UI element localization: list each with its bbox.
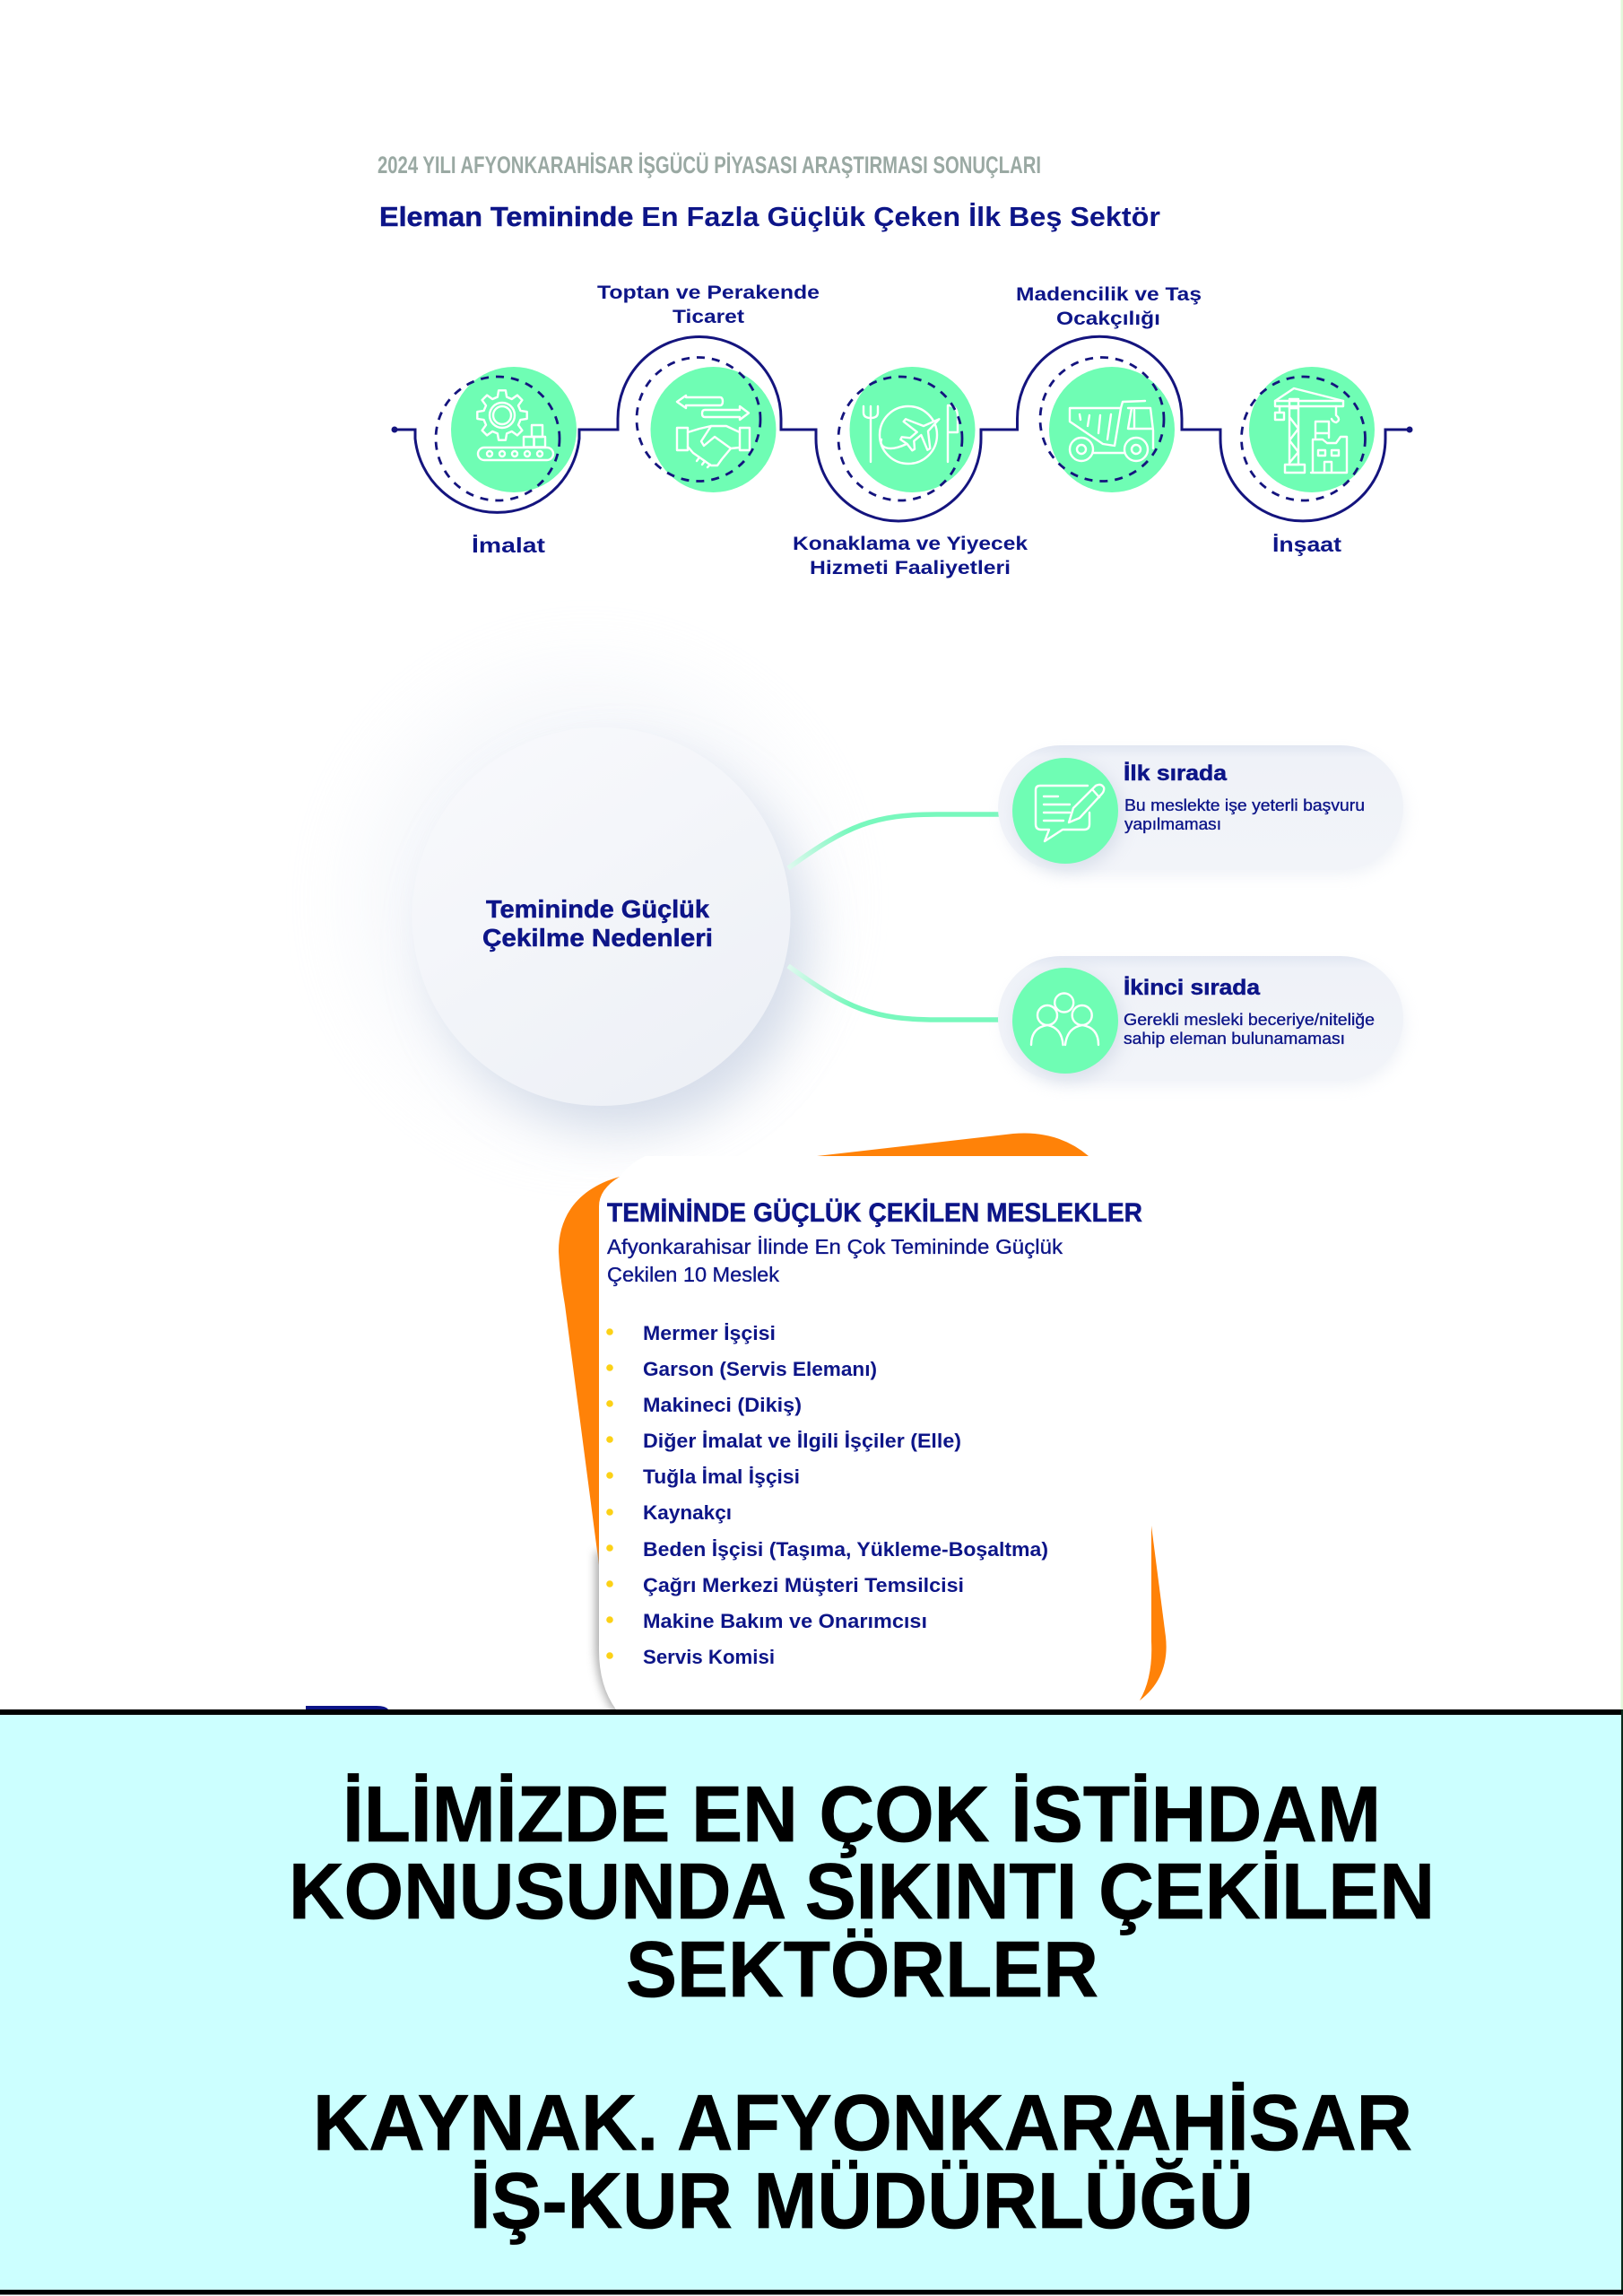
sector: Toptan ve Perakende Ticaret (597, 283, 820, 492)
label: Madencilik ve Taş Ocakçılığı: Madencilik ve Taş (1016, 284, 1202, 305)
card subtitle: Çekilen 10 Meslek (607, 1263, 779, 1286)
banner right border (1621, 1709, 1623, 2294)
sector timeline chart (391, 283, 1413, 578)
list items: Makineci (Dikiş) (643, 1394, 802, 1416)
banner line: headline: KONUSUNDA SIKINTI ÇEKİLEN (289, 1847, 1435, 1935)
line end dots (391, 427, 1413, 432)
banner line: source: KAYNAK. AFYONKARAHİSAR (313, 2078, 1412, 2167)
panel: occupations card (559, 1134, 1167, 1711)
occupations list (606, 1322, 1048, 1668)
central circle label: Temininde Güçlük (486, 895, 710, 923)
orange accent left (559, 1177, 620, 1565)
text: second reason: sahip eleman bulunamaması (1124, 1029, 1345, 1048)
sector: Madencilik ve Taş Ocakçılığı (1016, 284, 1202, 492)
card subtitle (607, 1235, 1063, 1286)
sector: Konaklama ve Yiyecek (793, 367, 1028, 578)
panel: reasons diagram (359, 673, 1404, 1130)
list items: Çağrı Merkezi Müşteri Temsilcisi (643, 1574, 964, 1596)
connector to first reason (788, 814, 1001, 868)
orange accent right (1139, 1526, 1167, 1700)
icon: tower crane and building (1275, 388, 1347, 473)
card: first reason (998, 745, 1404, 874)
banner line: headline: SEKTÖRLER (626, 1925, 1098, 2013)
list items: Beden İşçisi (Taşıma, Yükleme-Boşaltma) (643, 1538, 1048, 1561)
banner top border (0, 1709, 1623, 1715)
orange accent top (817, 1134, 1089, 1156)
report title: 2024 YILI AFYONKARAHİSAR İŞGÜCÜ PİYASASI ARAŞTIRMASI SONUÇLARI (378, 152, 1041, 178)
text: first reason: İlk sırada (1124, 761, 1228, 786)
card heading: TEMİNİNDE GÜÇLÜK ÇEKİLEN MESLEKLER (607, 1198, 1142, 1228)
banner: source note (0, 1709, 1623, 2294)
icon: speech note and pen (1036, 785, 1104, 841)
label: Madencilik ve Taş Ocakçılığı (1016, 284, 1202, 329)
text: second reason (1124, 976, 1375, 1048)
card body (599, 1156, 1151, 1709)
label: Toptan ve Perakende Ticaret: Ticaret (673, 307, 744, 327)
banner line: source (313, 2078, 1412, 2245)
text: first reason: yapılmaması (1124, 814, 1221, 833)
label: Toptan ve Perakende Ticaret (597, 283, 820, 327)
section heading: five sectors: Eleman Temininde En Fazla Güçlük Çeken İlk Beş Sektör (379, 201, 1160, 232)
list items: Kaynakçı (643, 1501, 732, 1524)
label: İmalat: İmalat (472, 534, 545, 557)
icon: gear and conveyor (477, 390, 553, 460)
icon: plate, cutlery and plane (864, 405, 958, 464)
label: Konaklama ve Yiyecek Hizmeti Faaliyetleri (793, 534, 1028, 578)
list items (643, 1322, 1048, 1668)
list items: Mermer İşçisi (643, 1322, 776, 1344)
label: Konaklama ve Yiyecek Hizmeti Faaliyetleri: Hizmeti Faaliyetleri (810, 558, 1011, 578)
list items: Tuğla İmal İşçisi (643, 1465, 800, 1488)
banner line: headline: İLİMİZDE EN ÇOK İSTİHDAM (343, 1770, 1381, 1858)
sector: İnşaat (1241, 367, 1375, 556)
banner background (0, 1712, 1623, 2292)
label: Konaklama ve Yiyecek Hizmeti Faaliyetleri: Konaklama ve Yiyecek (793, 534, 1028, 554)
text: second reason: İkinci sırada (1124, 976, 1261, 1000)
navy shape peeking above banner (306, 1706, 388, 1709)
connector to second reason (788, 966, 1001, 1020)
card shadow (595, 1552, 628, 1711)
banner bottom border (0, 2290, 1623, 2294)
central circle label: Çekilme Nedenleri (482, 924, 713, 952)
card: second reason (998, 956, 1404, 1084)
icon: dump truck (1070, 401, 1153, 461)
list items: Diğer İmalat ve İlgili İşçiler (Elle) (643, 1430, 961, 1452)
label: Madencilik ve Taş Ocakçılığı: Ocakçılığı (1056, 309, 1160, 329)
banner line: source: İŞ-KUR MÜDÜRLÜĞÜ (470, 2156, 1254, 2245)
sector: İmalat (436, 367, 577, 557)
list items: Servis Komisi (643, 1646, 775, 1668)
label: İnşaat: İnşaat (1272, 533, 1341, 556)
icon: group of people (1031, 994, 1098, 1045)
text: first reason: Bu meslekte işe yeterli başvuru (1124, 796, 1365, 814)
label: Toptan ve Perakende Ticaret: Toptan ve Perakende (597, 283, 820, 303)
icon: arrows and handshake (677, 396, 750, 467)
wavy connecting line (395, 336, 1410, 521)
central circle label (482, 895, 713, 952)
text: second reason: Gerekli mesleki beceriye/niteliğe (1124, 1010, 1375, 1029)
text: first reason (1124, 761, 1365, 833)
banner line: headline (289, 1770, 1435, 2013)
central circle with soft shadow (359, 673, 816, 1130)
card subtitle: Afyonkarahisar İlinde En Çok Temininde Güçlük (607, 1235, 1063, 1258)
right edge accent line (1621, 0, 1623, 1709)
list items: Garson (Servis Elemanı) (643, 1358, 877, 1380)
list items: Makine Bakım ve Onarımcısı (643, 1610, 927, 1632)
list bullets (606, 1328, 613, 1659)
